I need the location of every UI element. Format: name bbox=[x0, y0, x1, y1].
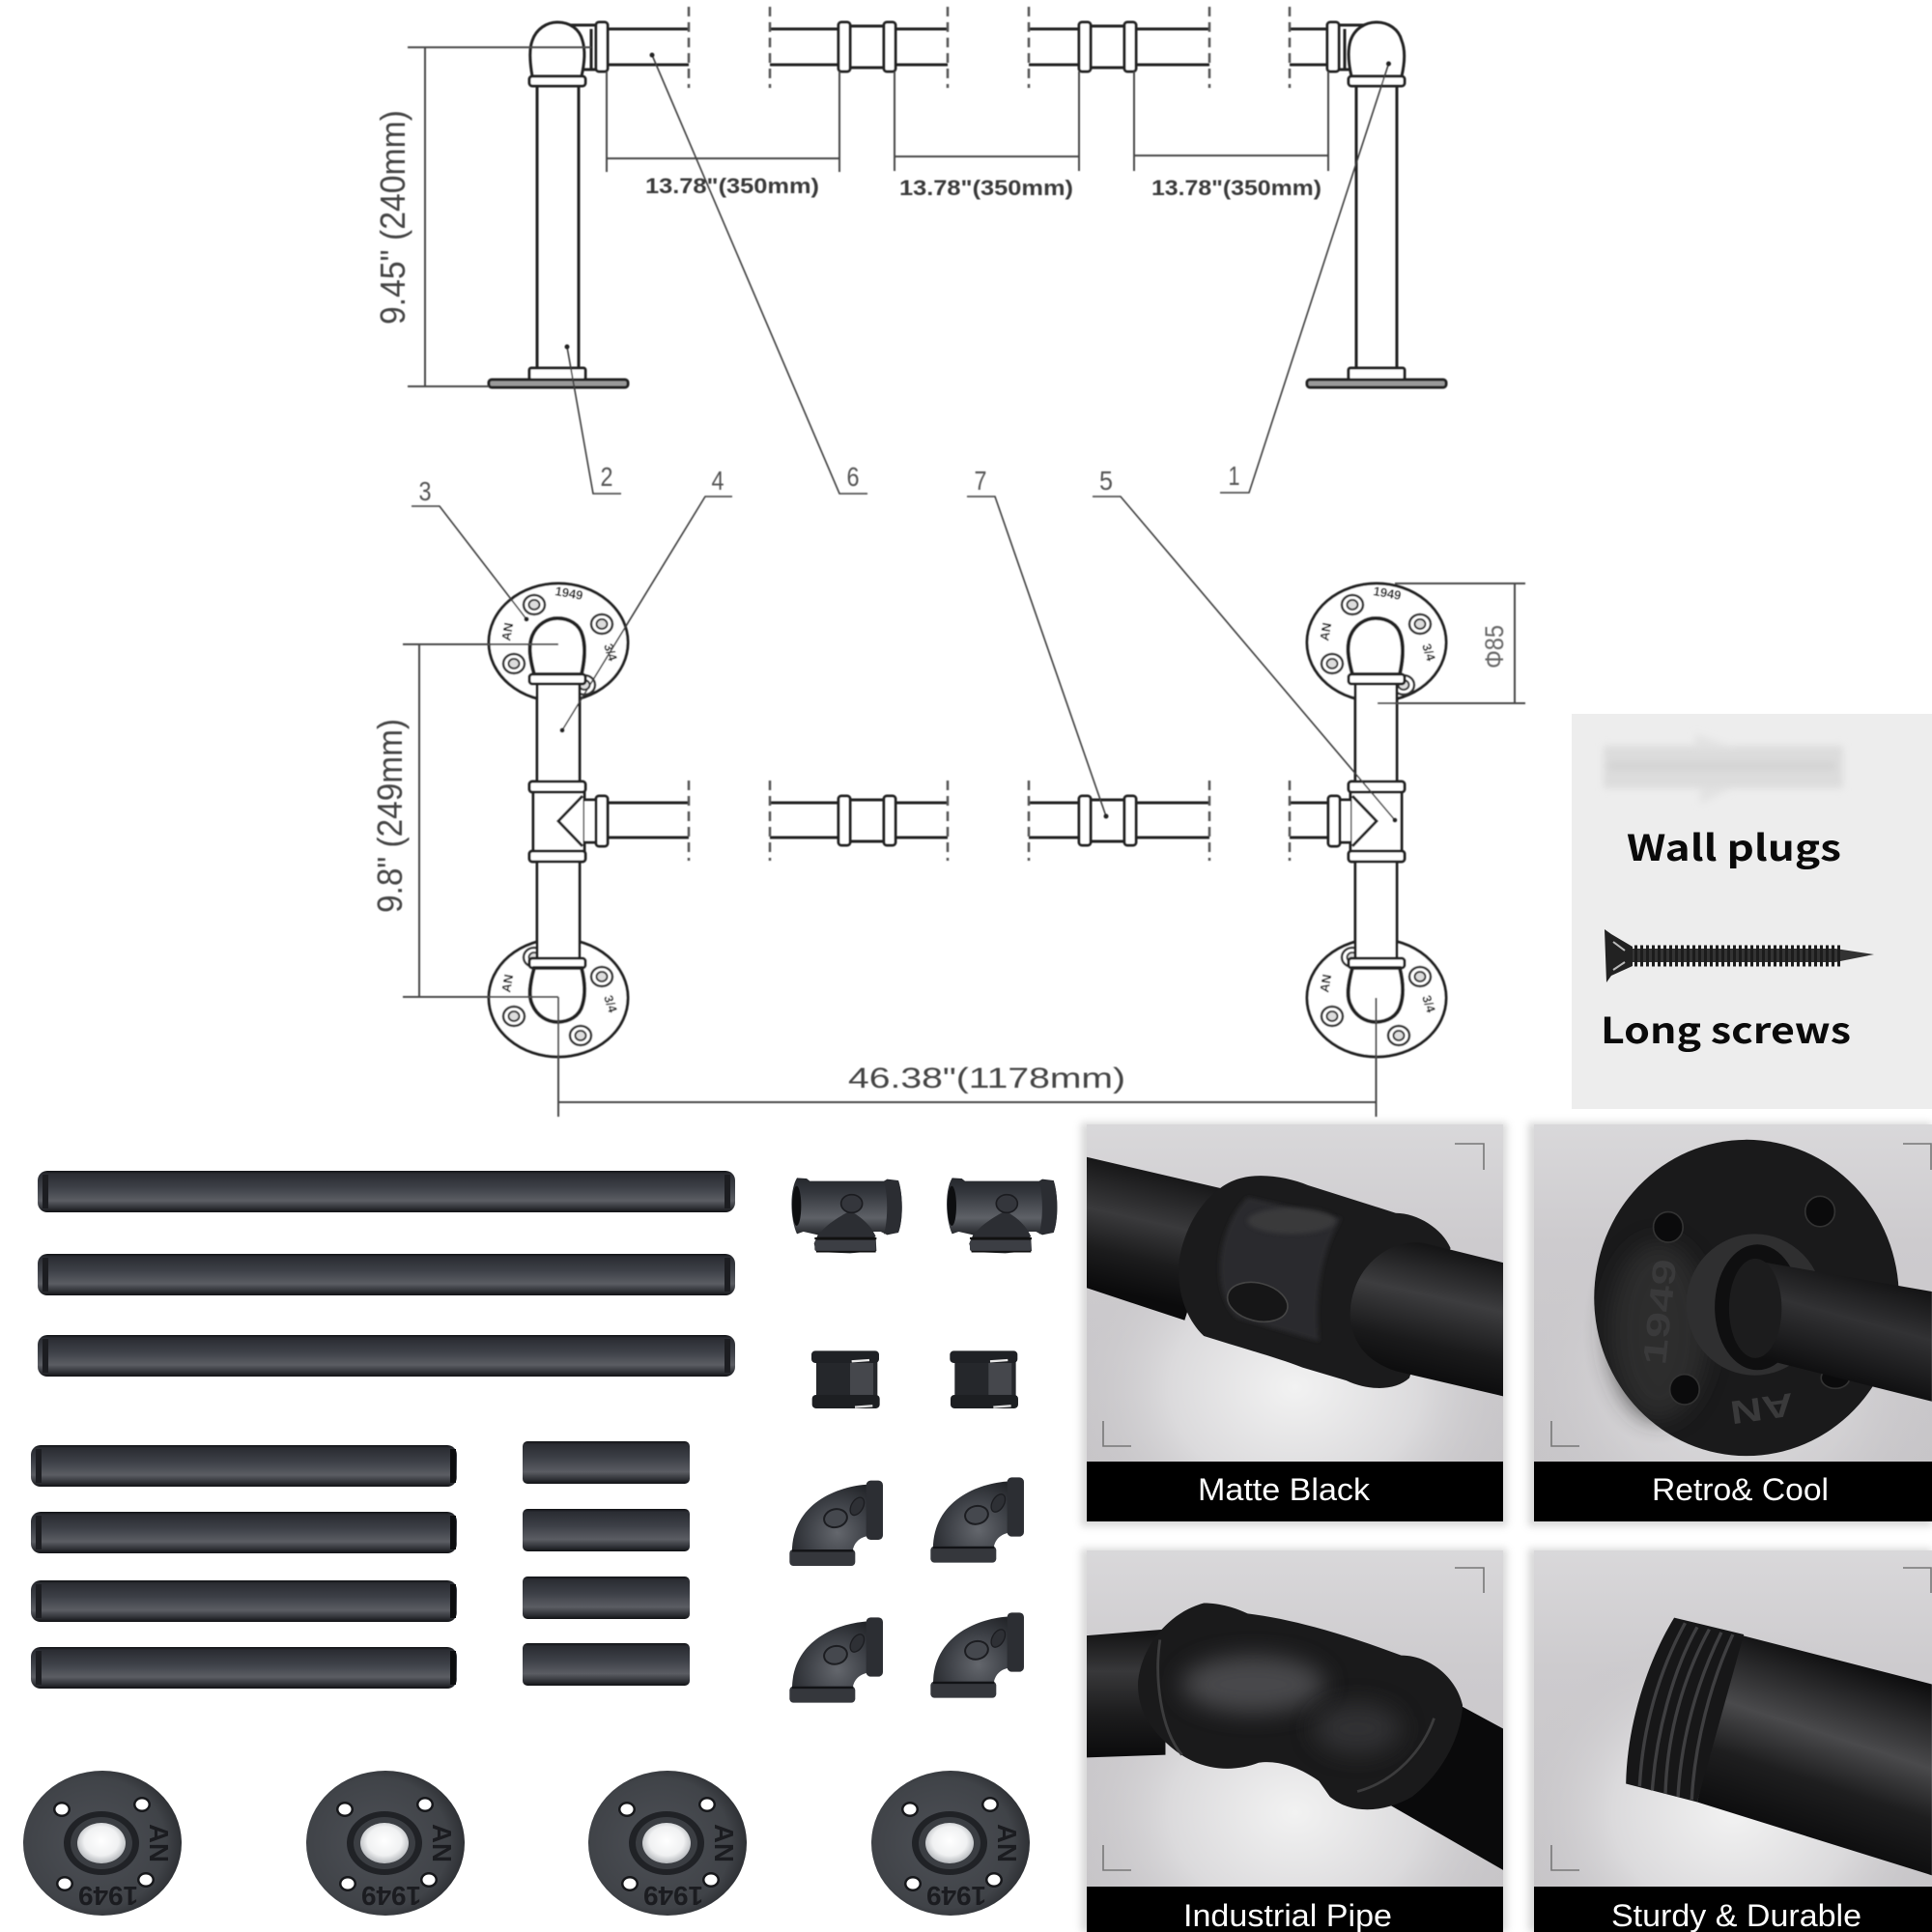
front view: right flange bottom: AN bbox=[1317, 973, 1334, 994]
parts: floor flange 4: 1949 bbox=[926, 1881, 986, 1911]
panel: sturdy and durable photo bbox=[1528, 1548, 1932, 1932]
callout 7: 7 bbox=[974, 466, 987, 496]
panel: retro and cool photo bbox=[1528, 1122, 1932, 1526]
caption bar bbox=[1534, 1462, 1932, 1521]
parts: floor flange 2 bbox=[306, 1771, 465, 1916]
callout 3: 3 bbox=[419, 476, 431, 506]
heading: long screws: Long screws bbox=[1601, 1002, 1851, 1054]
dimension: right rail 350mm bbox=[1134, 71, 1328, 200]
panel: industrial pipe photo bbox=[1081, 1548, 1507, 1932]
parts: floor flange 1: 1949 bbox=[78, 1881, 138, 1911]
front view: horizontal rail segments bbox=[608, 781, 1328, 861]
panel: wall plugs and long screws bbox=[1572, 714, 1932, 1109]
dimension: middle rail 350mm bbox=[895, 71, 1079, 200]
front view: left flange top: 3/4 bbox=[601, 641, 620, 664]
caption: industrial pipe: Industrial Pipe bbox=[1183, 1898, 1392, 1932]
icon: screw bbox=[1605, 929, 1874, 982]
front view: left flange bottom: 3/4 bbox=[601, 993, 620, 1015]
side view: horizontal rail segments bbox=[608, 7, 1327, 88]
front view: right flange bottom: 3/4 bbox=[1419, 993, 1438, 1015]
front view: right flange top: 1949 bbox=[1372, 583, 1403, 603]
front view: left flange top bbox=[489, 583, 628, 701]
parts: floor flange 1: AN bbox=[144, 1824, 174, 1862]
parts: floor flange 3: AN bbox=[709, 1824, 739, 1862]
corner mark bbox=[1903, 1144, 1931, 1170]
front view: left flange bottom: AN bbox=[498, 973, 516, 994]
corner mark bbox=[1103, 1845, 1131, 1870]
parts: floor flange 4 bbox=[871, 1771, 1030, 1916]
front view: right flange top: 3/4 bbox=[1419, 641, 1438, 664]
corner mark bbox=[1903, 1568, 1931, 1593]
dimension: middle rail 350mm: 13.78"(350mm) bbox=[899, 176, 1073, 200]
parts: short pipes bbox=[523, 1441, 690, 1686]
caption: sturdy and durable: Sturdy & Durable bbox=[1611, 1898, 1861, 1932]
parts: floor flange 2: AN bbox=[427, 1824, 457, 1862]
caption: retro and cool: Retro& Cool bbox=[1652, 1472, 1829, 1507]
dimension: flange diameter 85: Φ85 bbox=[1480, 625, 1509, 668]
heading: wall plugs: Wall plugs bbox=[1627, 819, 1841, 871]
front view: left flange top: 1949 bbox=[554, 583, 584, 603]
parts: tee fittings bbox=[791, 1178, 1057, 1253]
dimension: 46.38 inch overall length: 46.38"(1178mm) bbox=[848, 1063, 1125, 1094]
front view: left flange bottom bbox=[489, 939, 628, 1057]
dimension: flange diameter 85 bbox=[1378, 583, 1525, 703]
front view: right upright with tee bbox=[1328, 618, 1405, 1022]
parts: floor flange 3: 1949 bbox=[643, 1881, 703, 1911]
dimension: right rail 350mm: 13.78"(350mm) bbox=[1151, 176, 1321, 200]
corner mark bbox=[1103, 1421, 1131, 1446]
callout 1: 1 bbox=[1229, 461, 1240, 491]
dimension: 9.8 inch height: 9.8" (249mm) bbox=[370, 719, 410, 913]
caption: matte black: Matte Black bbox=[1198, 1472, 1371, 1507]
side view: left bracket bbox=[489, 22, 628, 387]
callout 2 bbox=[564, 344, 621, 494]
icon: wall plug bbox=[1604, 734, 1843, 804]
callout 3 bbox=[412, 476, 529, 622]
embossed text: AN: AN bbox=[1728, 1385, 1796, 1431]
dimension: 9.8 inch height bbox=[370, 644, 558, 997]
corner mark bbox=[1455, 1568, 1484, 1593]
dimension: 9.45 inch height: 9.45" (240mm) bbox=[373, 110, 412, 325]
corner mark bbox=[1455, 1144, 1484, 1170]
front view: left upright with tee bbox=[529, 618, 608, 1022]
caption bar bbox=[1087, 1887, 1503, 1932]
callout 2: 2 bbox=[601, 462, 612, 492]
side view: right bracket bbox=[1307, 22, 1446, 387]
dimension: left rail 350mm: 13.78"(350mm) bbox=[645, 174, 819, 198]
callout 7 bbox=[967, 466, 1109, 819]
parts: elbows bbox=[789, 1477, 1024, 1703]
callout 1 bbox=[1220, 62, 1391, 493]
dimension: left rail 350mm bbox=[607, 71, 839, 198]
front view: right flange top: AN bbox=[1317, 621, 1334, 642]
caption bar bbox=[1087, 1462, 1503, 1521]
dimension: 9.45 inch height bbox=[373, 47, 591, 386]
parts: couplings bbox=[811, 1350, 1018, 1408]
parts: long pipes bbox=[38, 1171, 735, 1377]
callout 4 bbox=[560, 466, 732, 732]
technical drawing: side view and front view with dimensions bbox=[370, 7, 1525, 1117]
parts: floor flange 4: AN bbox=[992, 1824, 1022, 1862]
panel: matte black photo bbox=[1081, 1122, 1507, 1526]
callout 6: 6 bbox=[846, 462, 860, 492]
parts: floor flange 1 bbox=[23, 1771, 182, 1916]
front view: left flange top: AN bbox=[498, 621, 516, 642]
front view: right flange bottom bbox=[1307, 939, 1446, 1057]
embossed text: 1949: 1949 bbox=[1636, 1257, 1684, 1367]
front view: right flange top bbox=[1307, 583, 1446, 701]
corner mark bbox=[1551, 1845, 1579, 1870]
caption bar bbox=[1534, 1887, 1932, 1932]
parts: floor flange 2: 1949 bbox=[361, 1881, 421, 1911]
callout 6 bbox=[649, 52, 867, 494]
callout 5: 5 bbox=[1099, 466, 1113, 496]
dimension: 46.38 inch overall length bbox=[558, 997, 1376, 1117]
parts: floor flange 3 bbox=[588, 1771, 747, 1916]
parts: medium pipes bbox=[31, 1445, 457, 1689]
corner mark bbox=[1551, 1421, 1579, 1446]
callout 4: 4 bbox=[711, 466, 724, 496]
callout 5 bbox=[1093, 466, 1397, 823]
